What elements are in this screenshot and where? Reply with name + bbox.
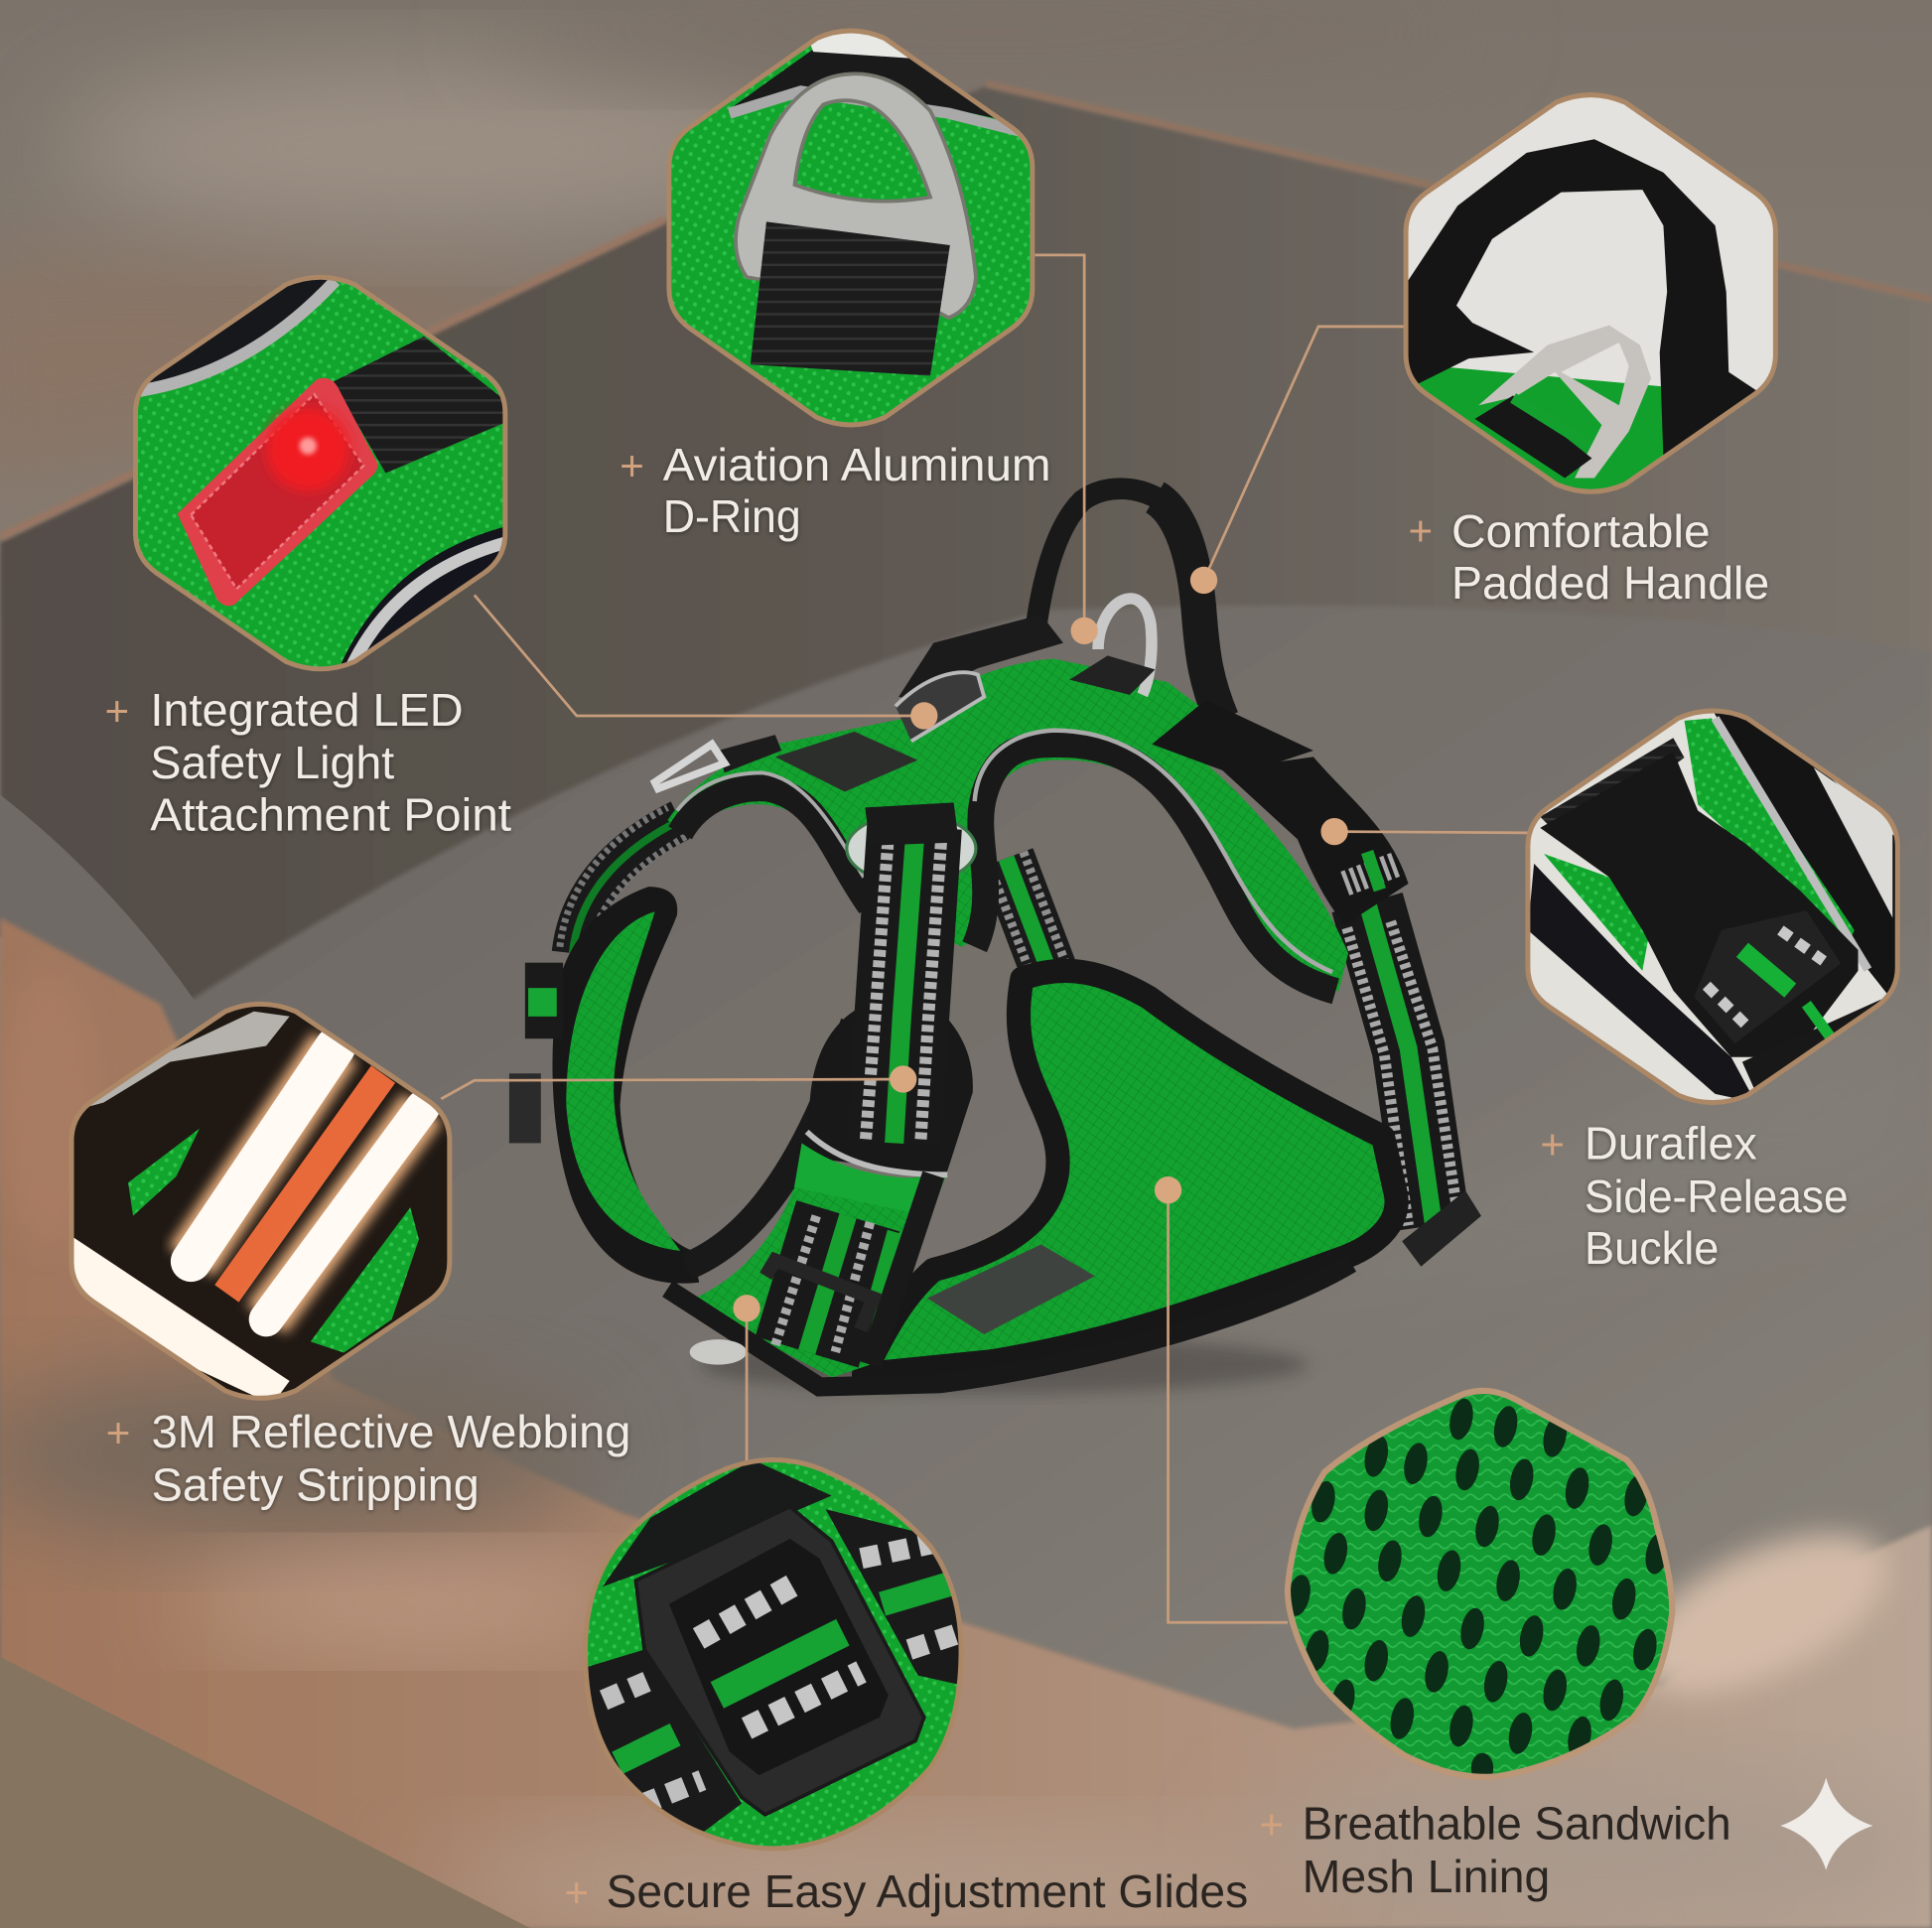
lower webbing	[775, 1216, 895, 1352]
hexagon: buckle	[1516, 702, 1910, 1121]
right arch trim	[975, 731, 1335, 991]
icon: sparkle	[1780, 1778, 1872, 1870]
label: Duraflex Side-Release Buckle: Side-Release	[1585, 1171, 1849, 1222]
back-left webbing strap	[560, 807, 686, 956]
label: 3M Reflective Webbing Safety Stripping: Safety Stripping	[152, 1458, 480, 1510]
label: Integrated LED Safety Light Attachment Point	[104, 684, 511, 840]
keeper	[865, 802, 959, 846]
D-ring patch	[1069, 655, 1155, 695]
hexagon: D-ring	[667, 28, 1035, 427]
leg loop inner band	[686, 1023, 855, 1267]
left arch trim	[677, 772, 870, 905]
label: 3M Reflective Webbing Safety Stripping: +	[106, 1410, 130, 1456]
label: Integrated LED Safety Light Attachment Point: Attachment Point	[150, 788, 511, 840]
chest O-ring	[847, 814, 976, 884]
far side webbing strap	[989, 852, 1067, 982]
label: Aviation Aluminum D-Ring: +	[620, 443, 644, 489]
label: Duraflex Side-Release Buckle: Buckle	[1585, 1222, 1719, 1274]
label: Duraflex Side-Release Buckle	[1540, 1118, 1849, 1274]
label: Comfortable Padded Handle: +	[1409, 508, 1433, 555]
hexagon: reflective webbing	[69, 1001, 453, 1401]
belly panel	[864, 971, 1397, 1374]
mid green patch and reflective stripe	[794, 1132, 947, 1216]
bottom ring	[690, 1339, 747, 1365]
label: Secure Easy Adjustment Glides: Secure Easy Adjustment Glides	[607, 1865, 1248, 1917]
right webbing strap	[1347, 902, 1459, 1225]
top-left collar buckle	[898, 615, 1063, 700]
handle base	[1152, 700, 1313, 776]
label: Duraflex Side-Release Buckle: +	[1540, 1122, 1565, 1169]
chest collar	[794, 1007, 973, 1174]
label: Breathable Sandwich Mesh Lining: Mesh Lining	[1303, 1851, 1550, 1902]
label: 3M Reflective Webbing Safety Stripping	[106, 1406, 630, 1510]
leg loop	[552, 887, 699, 1284]
hexagon: padded handle	[1392, 86, 1787, 505]
hexagon: LED light	[123, 265, 517, 684]
hexagon: mesh lining	[1276, 1380, 1682, 1786]
label: Duraflex Side-Release Buckle: Duraflex	[1585, 1118, 1757, 1170]
front webbing strap	[866, 827, 941, 1143]
D-ring	[1098, 599, 1152, 695]
back patch	[775, 732, 917, 791]
lower chest green panel	[686, 1174, 946, 1377]
label: Breathable Sandwich Mesh Lining: Breathable Sandwich	[1303, 1798, 1731, 1850]
padded handle	[1035, 488, 1221, 719]
label: Integrated LED Safety Light Attachment Point: +	[104, 688, 129, 735]
connector dots	[733, 567, 1348, 1321]
buckle strap end	[1345, 852, 1396, 890]
label: Comfortable Padded Handle: Comfortable	[1451, 505, 1711, 557]
harness product	[509, 488, 1481, 1393]
label: Comfortable Padded Handle	[1409, 505, 1769, 609]
label: Integrated LED Safety Light Attachment Point: Safety Light	[150, 737, 394, 788]
hexagon: adjustment glide	[573, 1447, 973, 1860]
side buckle	[1221, 757, 1409, 924]
silver ring	[896, 672, 984, 741]
glide	[765, 1260, 874, 1330]
label: Aviation Aluminum D-Ring	[620, 439, 1051, 542]
label: Secure Easy Adjustment Glides: +	[564, 1869, 589, 1916]
label: Breathable Sandwich Mesh Lining: +	[1259, 1802, 1284, 1849]
edge trims	[667, 1174, 1351, 1387]
label: Integrated LED Safety Light Attachment Point: Integrated LED	[150, 684, 464, 736]
label: 3M Reflective Webbing Safety Stripping: 3M Reflective Webbing	[152, 1406, 630, 1457]
back plate	[667, 659, 1348, 991]
label: Aviation Aluminum D-Ring: Aviation Aluminum	[663, 439, 1051, 490]
side webbing tag	[509, 963, 563, 1143]
panel patch	[927, 1244, 1095, 1334]
label: Comfortable Padded Handle: Padded Handle	[1451, 557, 1769, 609]
label: Aviation Aluminum D-Ring: D-Ring	[663, 490, 801, 542]
left side buckle	[655, 735, 781, 788]
lower right slider	[1402, 1190, 1481, 1267]
leader lines	[441, 255, 1528, 1622]
label: Breathable Sandwich Mesh Lining	[1259, 1798, 1731, 1902]
